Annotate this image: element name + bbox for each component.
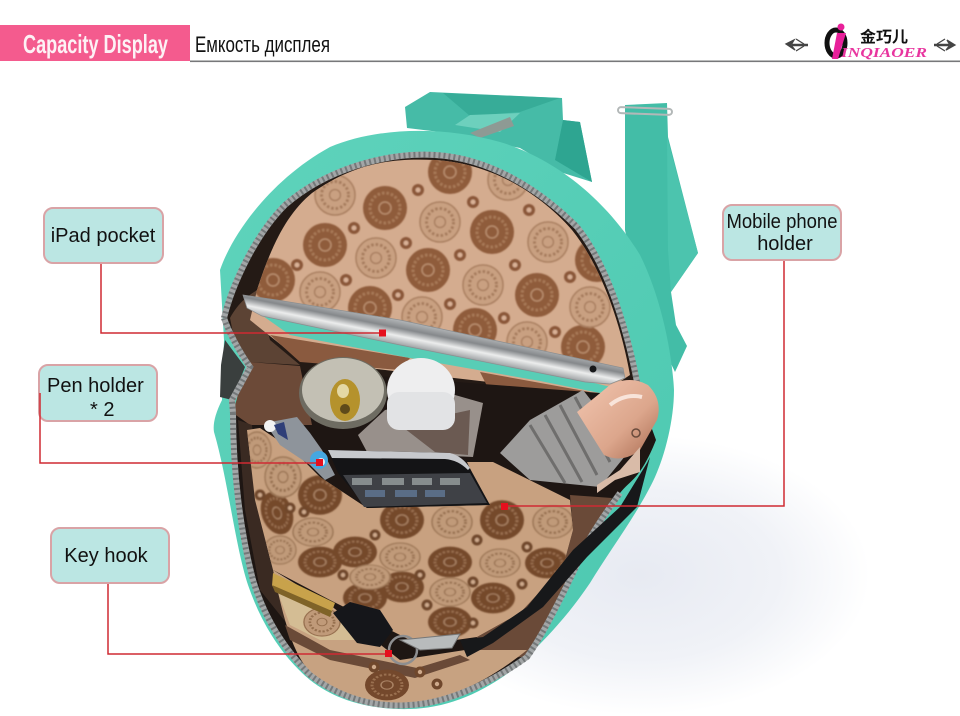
brand logo: INQIAOER: [840, 46, 927, 61]
brand logo: 金巧儿: [860, 27, 908, 46]
water bottle: [358, 358, 483, 457]
callout: iPad pocket: iPad pocket: [51, 225, 156, 247]
strap: right shoulder webbing: [618, 103, 698, 372]
floor shadow: [410, 435, 870, 715]
can lid: [299, 357, 387, 429]
callout: Pen holder: [39, 365, 323, 466]
zipper tape: [224, 155, 637, 706]
keys: [272, 573, 460, 664]
tablet in iPad pocket: [243, 295, 625, 384]
callout: Mobile phone holder: [501, 205, 841, 510]
callout: Pen holder: * 2: [90, 399, 114, 421]
callout: Key hook: Key hook: [64, 545, 149, 567]
brand logo: [786, 24, 955, 61]
callout: Key hook: [51, 528, 392, 657]
top carry handle: [405, 92, 592, 182]
backpack: [214, 92, 698, 709]
lower compartment: [233, 362, 656, 706]
heading: Russian subtitle: Емкость дисплея: [195, 32, 330, 57]
lower lip of the pocket: [273, 570, 527, 703]
callout: Mobile phone holder: Mobile phone: [726, 211, 838, 233]
heading: Capacity Display: Capacity Display: [23, 29, 168, 59]
umbrella: [500, 380, 659, 493]
lining with medallions: [250, 160, 630, 393]
callout: Mobile phone holder: holder: [757, 233, 813, 255]
upper compartment: [224, 150, 640, 400]
callout: Pen holder: Pen holder: [47, 375, 144, 397]
header bar: [0, 25, 960, 62]
black strap: [460, 457, 650, 657]
phone: [328, 450, 490, 508]
teal sleeve under tablet: [263, 316, 615, 393]
callout: iPad pocket: [44, 208, 386, 336]
pocket lining with medallions: [240, 425, 580, 650]
brown fabric under tablet: [270, 335, 590, 400]
pens: [264, 417, 335, 480]
backpack shell: [214, 131, 674, 709]
side mesh pocket: [220, 340, 245, 400]
